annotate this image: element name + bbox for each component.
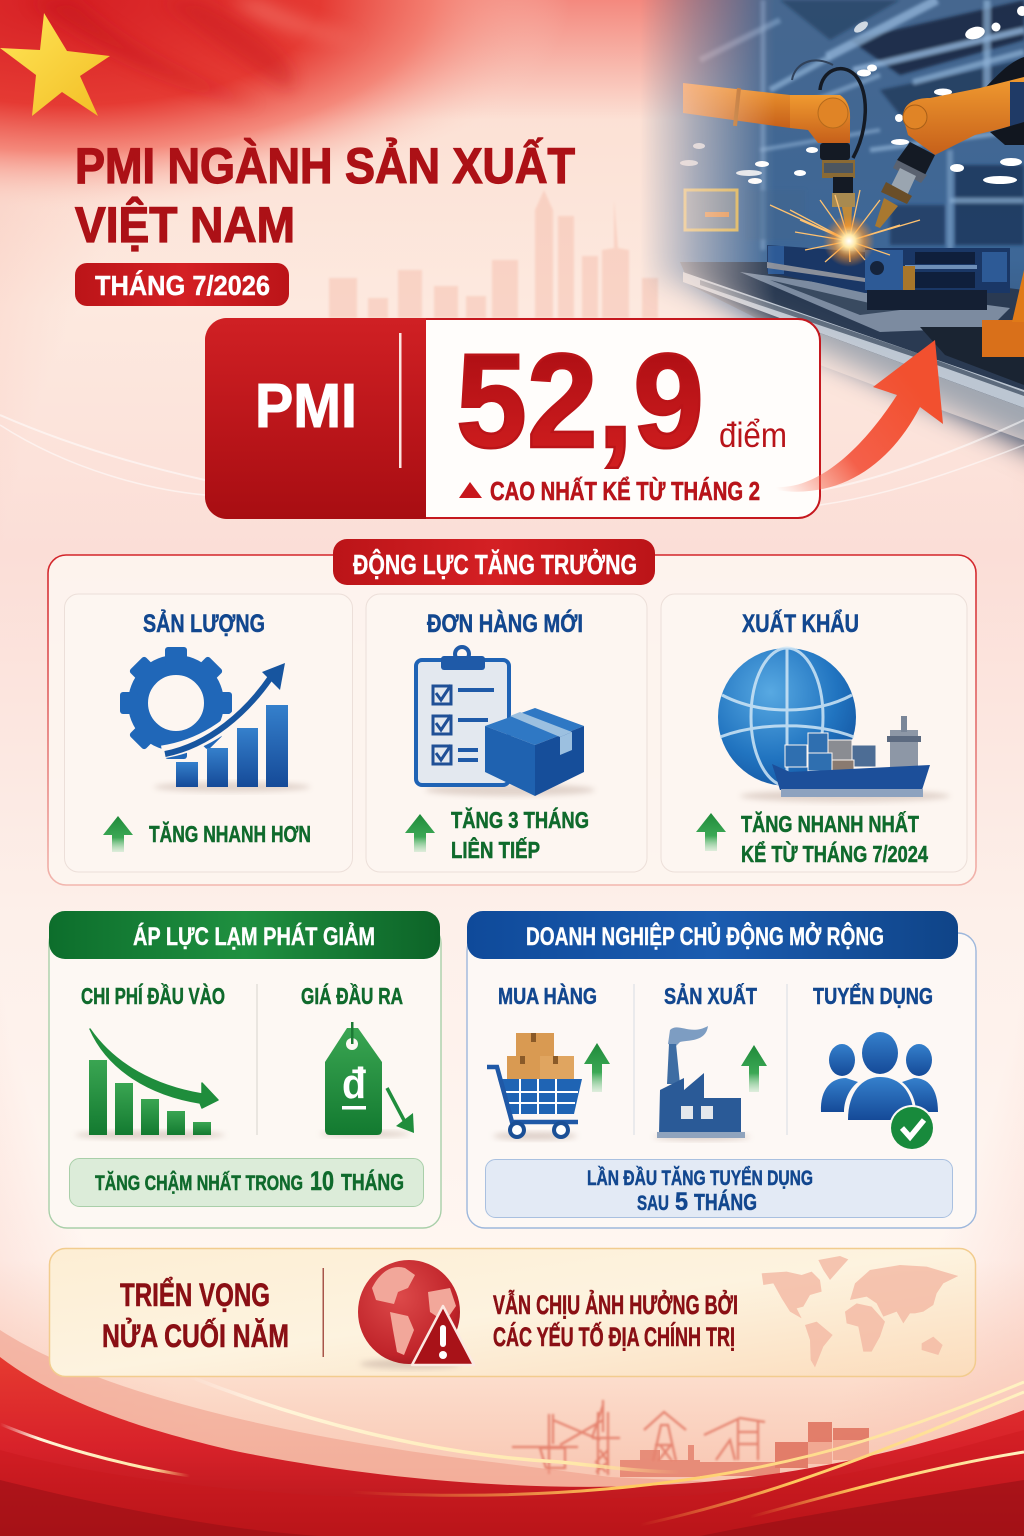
panel: business expansion: MUA HÀNG	[498, 982, 597, 1009]
card: exports: TĂNG NHANH NHẤT	[741, 810, 919, 837]
robot arm left	[683, 83, 790, 128]
card: new orders: TĂNG 3 THÁNG	[451, 806, 589, 833]
panel: business expansion	[467, 911, 976, 1228]
outlook text: CÁC YẾU TỐ ĐỊA CHÍNH TRỊ	[493, 1320, 735, 1352]
icon: price tag: đ	[342, 1059, 366, 1108]
outlook heading	[102, 1277, 289, 1354]
card: output: TĂNG NHANH HƠN	[149, 820, 311, 847]
panel: inflation pressure: GIÁ ĐẦU RA	[301, 982, 403, 1009]
world map	[762, 1256, 958, 1367]
icon: shopping cart	[487, 1033, 582, 1140]
bottom red waves	[0, 1330, 1024, 1536]
card: new orders: LIÊN TIẾP	[451, 836, 540, 863]
icon: price tag	[320, 1022, 414, 1137]
header bar	[467, 911, 958, 959]
outlook text: VẪN CHỊU ẢNH HƯỞNG BỞI	[493, 1288, 738, 1320]
note: slowest rise	[70, 1158, 424, 1206]
panel: inflation pressure: CHI PHÍ ĐẦU VÀO	[81, 982, 225, 1009]
machine	[767, 245, 1010, 310]
panel: business expansion: SẢN XUẤT	[664, 981, 757, 1009]
note: hiring	[486, 1160, 952, 1218]
panel: business expansion: TUYỂN DỤNG	[813, 982, 933, 1009]
icon: clipboard and box	[416, 647, 595, 796]
faint white swooshes around the PMI card	[0, 415, 1024, 505]
icon: up arrow	[405, 814, 435, 852]
note: slowest rise: TĂNG CHẬM NHẤT TRONG	[95, 1171, 303, 1195]
PMI value: 52,9	[456, 327, 704, 476]
icon: red globe with warning	[358, 1260, 474, 1369]
factory photo with robot arms	[646, 0, 1024, 470]
icon: up arrow	[103, 816, 133, 852]
unit: điểm	[719, 416, 787, 455]
icon: team with check	[821, 1032, 938, 1151]
note: hiring: 5	[675, 1188, 688, 1216]
light swooshes	[0, 1376, 1024, 1525]
skyline silhouette	[329, 190, 658, 318]
icon: factory	[654, 1026, 750, 1140]
card: output: SẢN LƯỢNG	[143, 608, 265, 638]
PMI card white body	[206, 319, 820, 518]
icon: globe and cargo ship	[718, 648, 950, 802]
shelves	[955, 165, 1024, 245]
card: output	[64, 594, 352, 872]
heading badge	[333, 539, 655, 585]
panel: outlook	[50, 1248, 976, 1376]
PMI label block: PMI	[255, 372, 357, 441]
subtitle with triangle: CAO NHẤT KỂ TỪ THÁNG 2	[490, 476, 760, 506]
icon: up arrow	[696, 813, 726, 851]
card: exports: KỂ TỪ THÁNG 7/2024	[741, 840, 928, 867]
date badge: THÁNG 7/2026	[95, 270, 270, 301]
title	[75, 138, 575, 253]
orange base	[982, 320, 1024, 357]
note: hiring: LẦN ĐẦU TĂNG TUYỂN DỤNG	[587, 1167, 813, 1190]
outlook text	[493, 1288, 738, 1352]
icon: yellow star	[0, 13, 110, 116]
flag background with star	[0, 0, 640, 300]
robot arm right	[985, 57, 1024, 88]
card: exports	[661, 594, 967, 872]
title: VIỆT NAM	[75, 197, 295, 253]
icon: up arrow	[584, 1043, 610, 1092]
panel: growth drivers	[48, 539, 976, 885]
port cranes silhouette	[512, 1400, 869, 1477]
ceiling	[700, 0, 1024, 250]
card: new orders: ĐƠN HÀNG MỚI	[427, 608, 583, 638]
header bar: ÁP LỰC LẠM PHÁT GIẢM	[133, 921, 375, 951]
heading badge: ĐỘNG LỰC TĂNG TRƯỞNG	[353, 548, 637, 580]
icon: up arrow	[741, 1045, 767, 1092]
icon: gear and bars	[120, 647, 310, 792]
outlook heading: TRIỂN VỌNG	[120, 1277, 270, 1313]
welding spark	[770, 190, 920, 262]
title: PMI NGÀNH SẢN XUẤT	[75, 138, 575, 194]
panel: inflation pressure	[49, 911, 441, 1228]
icon: falling bars	[75, 1029, 225, 1139]
header bar	[49, 911, 440, 959]
outlook heading: NỬA CUỐI NĂM	[102, 1318, 289, 1354]
arrow: rising trend	[775, 340, 943, 492]
PMI headline card	[205, 318, 820, 519]
note: hiring: SAU	[637, 1192, 669, 1215]
card: exports: XUẤT KHẨU	[742, 609, 859, 638]
card: new orders	[366, 594, 647, 872]
floor and rails	[680, 262, 1024, 392]
header bar: DOANH NGHIỆP CHỦ ĐỘNG MỞ RỘNG	[526, 921, 884, 951]
note: hiring: THÁNG	[694, 1188, 757, 1215]
PMI label block	[205, 318, 426, 519]
date badge	[75, 263, 289, 306]
note: slowest rise: THÁNG	[341, 1168, 404, 1195]
note: slowest rise: 10	[310, 1166, 334, 1196]
